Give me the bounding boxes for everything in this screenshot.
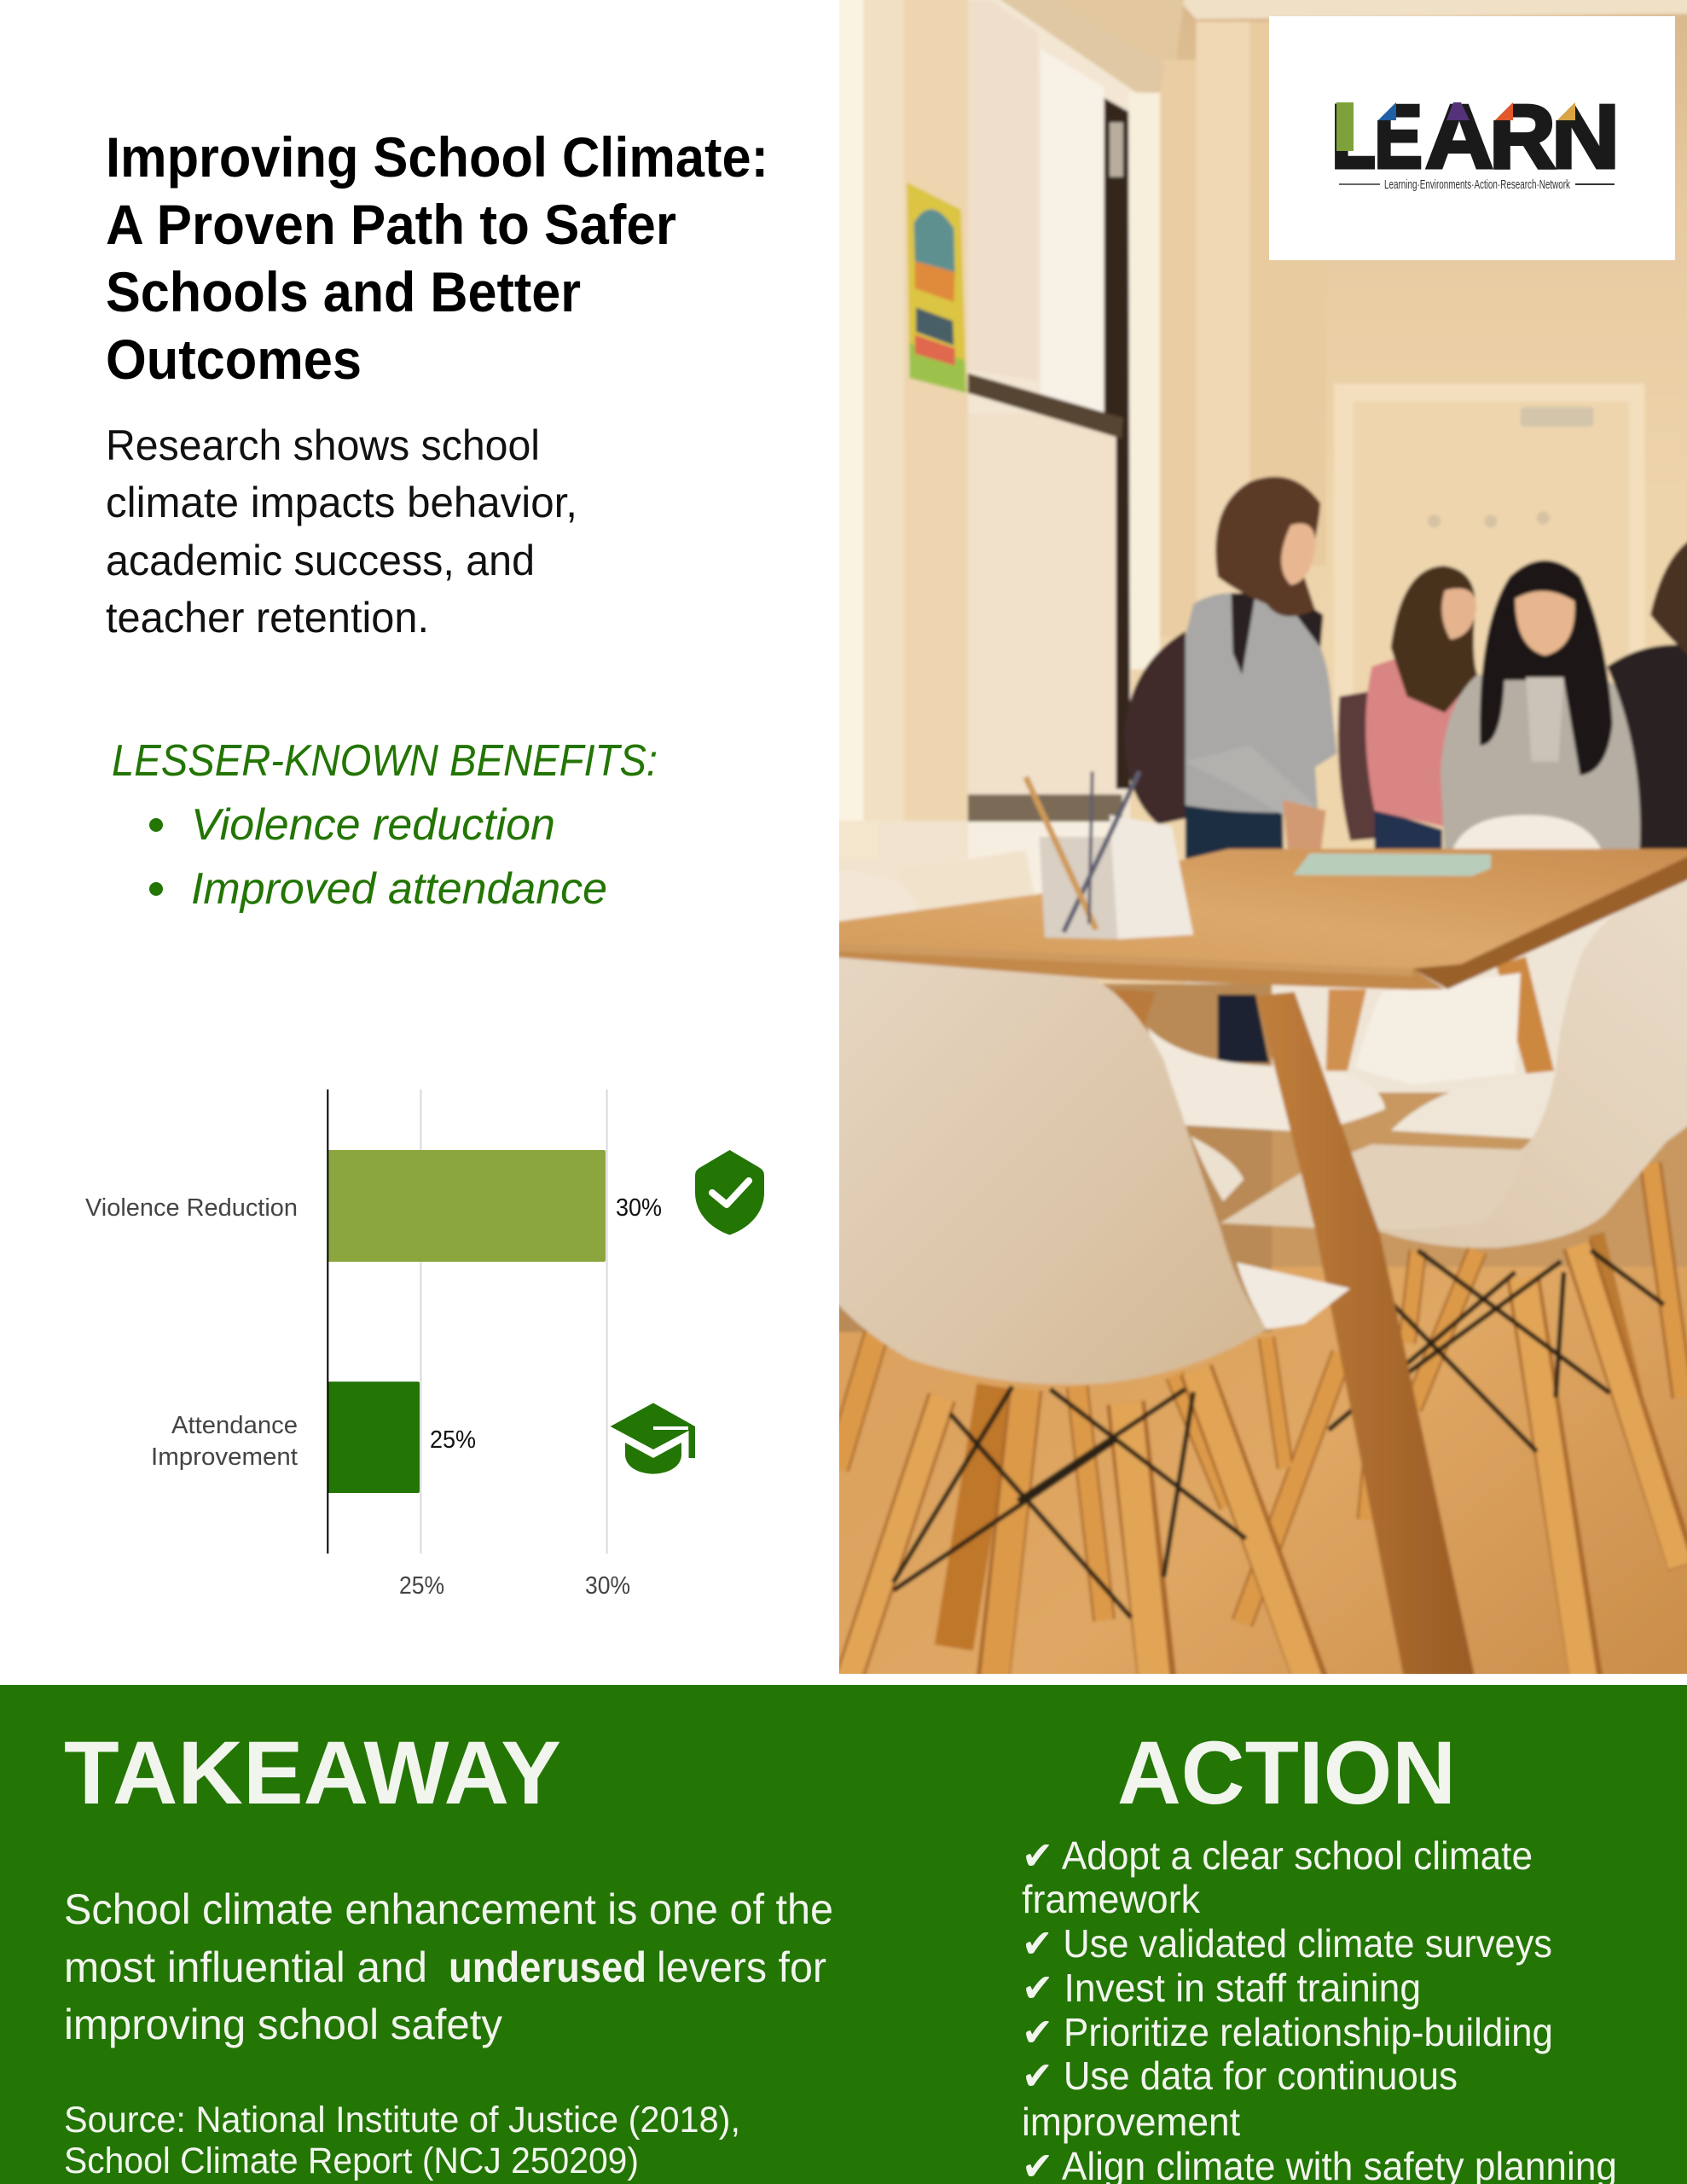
takeaway text: most influential and: [64, 1943, 427, 1991]
axis tick labels: [399, 1572, 630, 1600]
student in plaid: [1338, 566, 1477, 870]
title: Schools and Better: [106, 260, 581, 323]
logo wordmark: N: [1551, 87, 1620, 188]
bar chart: [85, 1089, 662, 1600]
logo card: [1269, 16, 1675, 260]
takeaway text: School climate enhancement is one of the: [64, 1885, 833, 1933]
main table leg: [1256, 992, 1478, 1693]
tabletop: [828, 849, 1687, 968]
rear chairs: [1147, 1027, 1385, 1131]
source note: School Climate Report (NCJ 250209): [64, 2140, 639, 2181]
title: Improving School Climate:: [106, 125, 768, 189]
benefits list: LESSER-KNOWN BENEFITS:: [112, 736, 658, 786]
action checklist: ✔ Use validated climate surveys: [1022, 1921, 1552, 1966]
value labels: 25%: [430, 1426, 476, 1454]
category labels: Attendance: [171, 1412, 298, 1439]
action checklist: ✔ Invest in staff training: [1022, 1966, 1421, 2010]
intro paragraph: [106, 421, 577, 642]
takeaway text: underused: [449, 1943, 646, 1991]
intro paragraph: Research shows school: [106, 421, 540, 469]
value labels: [430, 1194, 662, 1454]
intro paragraph: academic success, and: [106, 537, 535, 584]
source note: [64, 2100, 740, 2181]
rear table legs: [1496, 956, 1554, 1073]
benefits list: Improved attendance: [191, 864, 607, 914]
category labels: [85, 1194, 298, 1471]
action checklist: framework: [1022, 1877, 1201, 1921]
logo wordmark: L: [1331, 87, 1376, 188]
title: A Proven Path to Safer: [106, 193, 676, 256]
notebook on table: [1294, 853, 1491, 876]
wooden chair legs: [837, 1164, 1683, 1691]
title: [106, 125, 768, 391]
icon: shield with check: [695, 1150, 764, 1235]
panel: intro text column: [106, 125, 768, 914]
bar: violence reduction 30%: [328, 1150, 606, 1262]
action checklist: ✔ Use data for continuous: [1022, 2053, 1458, 2098]
action checklist: [1022, 1833, 1617, 2184]
front chair: [828, 953, 1267, 1385]
right front chair: [1391, 1072, 1558, 1139]
lower room, table and chairs: [828, 771, 1687, 1697]
photo: students and teacher in a classroom: [828, 0, 1687, 1709]
student in grey sweatshirt: [1441, 561, 1645, 854]
category labels: Violence Reduction: [85, 1194, 298, 1222]
door: [1334, 384, 1645, 739]
student at right edge: [1607, 533, 1687, 870]
wall poster: [907, 183, 966, 392]
benefits list: [112, 736, 658, 914]
heading: action: ACTION: [1117, 1723, 1456, 1823]
takeaway text: levers for: [657, 1943, 826, 1991]
intro paragraph: climate impacts behavior,: [106, 479, 577, 526]
action checklist: ✔ Adopt a clear school climate: [1022, 1833, 1533, 1878]
axis tick labels: 30%: [585, 1572, 630, 1600]
intro paragraph: teacher retention.: [106, 594, 429, 642]
action checklist: improvement: [1022, 2100, 1240, 2144]
rear chair back at table: [1450, 815, 1604, 857]
pencil holder and paper: [1026, 771, 1193, 939]
title: Outcomes: [106, 328, 362, 391]
icon: graduation cap: [611, 1403, 695, 1474]
heading: takeaway: TAKEAWAY: [64, 1723, 561, 1823]
logo tagline: Learning·Environments·Action·Research·Network: [1384, 177, 1570, 192]
logo wordmark: A: [1425, 87, 1493, 188]
takeaway text: [64, 1885, 833, 2048]
bar: attendance improvement 25%: [328, 1382, 420, 1493]
logo wordmark: R: [1489, 87, 1556, 188]
takeaway text: improving school safety: [64, 2001, 502, 2048]
axis tick labels: 25%: [399, 1572, 444, 1600]
action checklist: ✔ Prioritize relationship-building: [1022, 2010, 1553, 2054]
wall and window section: [828, 0, 1687, 860]
source note: Source: National Institute of Justice (2018),: [64, 2100, 740, 2140]
benefits list: Violence reduction: [191, 800, 555, 850]
value labels: 30%: [616, 1194, 662, 1222]
table apron: [828, 945, 1445, 990]
logo wordmark: E: [1374, 87, 1423, 188]
teacher: [1125, 477, 1336, 870]
panel: green takeaway and action band: [0, 1685, 1687, 2184]
logo colour accents: [1326, 92, 1575, 151]
category labels: Improvement: [151, 1443, 298, 1471]
